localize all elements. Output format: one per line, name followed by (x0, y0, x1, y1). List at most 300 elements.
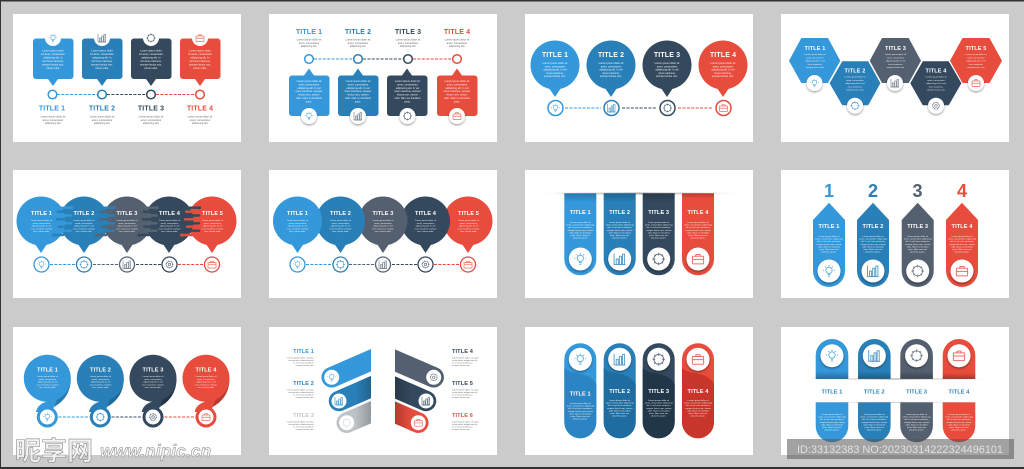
pill 3 (900, 339, 933, 442)
pin 1 (530, 40, 580, 97)
hexagon 5: risus maximus, (969, 63, 984, 66)
pill 4: odio. Nam eu tincidunt (948, 423, 970, 426)
box 4 (180, 30, 220, 86)
panel: circles with curled tails (13, 327, 241, 455)
box 3: lectus non, rutrum (397, 93, 418, 97)
box 2 (82, 30, 122, 86)
right labels: In vel risus maximus, (452, 394, 473, 396)
pill 1: odio. Nam eu tincidunt (569, 412, 592, 415)
curl 1: TITLE 1 (37, 368, 58, 374)
number row: 4 (957, 181, 967, 201)
pill 1: semper lectus non, rutrum (819, 421, 845, 424)
box 1: rutrum odio. (46, 66, 60, 70)
tab 2: pharetra quam. (612, 237, 628, 240)
hexagon 2: amet, consectetur (846, 79, 864, 82)
left labels (287, 349, 314, 431)
pin 5 (444, 196, 492, 253)
pill 4: pharetra quam. (952, 429, 967, 432)
pin 5: non, rutrum odio. (460, 230, 477, 233)
number row: 1 (824, 181, 834, 201)
arrow 4: pharetra quam. (955, 251, 970, 254)
curl 3 (130, 355, 177, 428)
curl 1: adipiscing elit. In vel (38, 381, 58, 384)
timeline (305, 55, 461, 63)
curl 2: non, rutrum odio. (92, 386, 109, 389)
curl 2 (77, 355, 124, 428)
watermark: image id bar: ID:33132383 NO:20230314222324496101 (797, 444, 1003, 456)
box 2: justo. (354, 99, 361, 103)
box 2 (338, 68, 378, 124)
pin 2: risus maximus, (602, 71, 620, 75)
titles: TITLE 4 (444, 29, 470, 36)
pin 1: amet, consectetur (289, 222, 306, 225)
hexagon 1: TITLE 1 (805, 46, 825, 52)
pin 1: TITLE 1 (287, 211, 308, 217)
pill 1: amet, consectetur adipiscing (566, 405, 595, 408)
curl 2: adipiscing elit. In vel (91, 381, 111, 384)
right labels: Lorem ipsum dolor sit amet, (452, 388, 479, 392)
title band: TITLE 1 (822, 389, 842, 395)
titles: TITLE 3 (395, 29, 421, 36)
pill 3: pharetra quam. (909, 429, 924, 432)
left labels: In vel risus maximus, (294, 362, 314, 364)
hexagon 2: adipiscing elit. In vel (845, 82, 865, 85)
curl 3: adipiscing elit. In vel (143, 381, 163, 384)
tab 1: TITLE 1 (570, 210, 591, 216)
pin labels: adipiscing elit. In vel (160, 225, 180, 228)
curl 4: adipiscing elit. In vel (196, 381, 216, 384)
pill 2: TITLE 2 (609, 389, 630, 395)
arrow 1: amet, consectetur adipiscing (815, 238, 844, 241)
box 3: odio. Nam eu tincidunt (395, 96, 421, 100)
tab 4 (682, 193, 714, 275)
pin 1: Lorem ipsum dolor sit (543, 61, 568, 65)
descriptions: adipiscing elit. (301, 44, 317, 48)
pill 3: odio. Nam eu tincidunt (648, 409, 670, 412)
arrow 4: elit. In vel risus maximus, (950, 240, 975, 243)
arrow 3: elit. In vel risus maximus, (905, 240, 930, 243)
title band (800, 378, 990, 403)
pill 3 (643, 343, 675, 438)
box 4: adipiscing elit. In vel (445, 86, 469, 90)
hexagon 1: Lorem ipsum dolor sit (805, 53, 826, 56)
arrow 4: justo. Nam sem nec (951, 248, 973, 251)
box 1: Lorem ipsum dolor sit (297, 79, 322, 83)
pin 1: TITLE 1 (542, 52, 568, 59)
titles: TITLE 2 (89, 106, 115, 112)
box 3: sit amet, consectetur (139, 52, 163, 56)
pin 4: adipiscing elit. In vel (416, 225, 436, 228)
pill 1: TITLE 1 (570, 392, 591, 398)
pill 1: justo. Nam sem nec (570, 415, 591, 418)
number row: 2 (868, 181, 878, 201)
pin labels: risus maximus semper (116, 227, 138, 230)
pill 1: pharetra quam. (825, 429, 840, 432)
title band: TITLE 2 (864, 389, 885, 395)
left labels: In vel risus maximus, (294, 394, 314, 396)
pill 2: pharetra quam. (867, 429, 882, 432)
right ribbons (375, 352, 434, 423)
tab 3: justo. Nam sem nec (648, 234, 669, 237)
pill 3: TITLE 3 (648, 389, 669, 395)
pin 2: TITLE 2 (330, 211, 351, 217)
pin 3: risus maximus, (658, 71, 676, 75)
pin labels: Lorem ipsum dolor sit (202, 219, 223, 222)
arrow 4: TITLE 4 (952, 224, 973, 230)
descriptions: amet, consectetur (141, 118, 161, 122)
descriptions: adipiscing elit. (350, 44, 366, 48)
hexagon 1: amet, consectetur (806, 56, 824, 59)
pin 5: TITLE 5 (458, 211, 479, 217)
pill 4: Lorem ipsum dolor sit (688, 399, 709, 402)
curl 4 (182, 355, 230, 428)
pin 2: amet, consectetur (601, 64, 621, 68)
descriptions: Lorem ipsum dolor sit (297, 38, 322, 42)
pin labels: amet, consectetur (204, 222, 221, 225)
box 4: adipiscing elit. In (190, 56, 210, 60)
arrow 1: semper lectus non, rutrum (816, 243, 842, 246)
pin 1: amet, consectetur (545, 64, 565, 68)
box 1: justo. (305, 99, 312, 103)
tab 2: semper lectus non, rutrum (607, 229, 633, 232)
arrow 2: TITLE 2 (863, 224, 883, 230)
descriptions: amet, consectetur (190, 118, 210, 122)
left labels: Lorem ipsum dolor sit amet, (287, 420, 314, 424)
curl 2: risus maximus semper (90, 383, 112, 386)
arrow 1: Lorem ipsum dolor sit (819, 235, 840, 238)
tab 4: pharetra quam. (691, 237, 706, 240)
descriptions: adipiscing elit. (45, 121, 61, 125)
pill 2: elit. In vel risus maximus, (607, 404, 632, 407)
pin 3 (102, 196, 152, 253)
pin labels: adipiscing elit. In vel (203, 225, 223, 228)
right labels: In vel risus maximus, (452, 362, 473, 364)
pin 3: Lorem ipsum dolor sit (655, 61, 680, 65)
pin 4: TITLE 4 (415, 211, 437, 217)
pin 3: semper lectus non. (656, 74, 678, 78)
right labels: consectetur adipiscing elit. (452, 359, 478, 362)
descriptions: adipiscing elit. (143, 121, 159, 125)
curl 1 (24, 355, 71, 428)
pin labels: amet, consectetur (161, 222, 178, 225)
arrow 2: pharetra quam. (866, 251, 881, 254)
left labels: TITLE 1 (293, 349, 314, 355)
curl 3: risus maximus semper (142, 383, 164, 386)
hexagon 3: adipiscing elit. In vel (886, 60, 906, 63)
box 1: Lorem ipsum dolor (42, 48, 64, 52)
pin 4 (144, 196, 194, 253)
left labels: semper lectus non. (296, 428, 314, 431)
pin labels: TITLE 4 (159, 211, 181, 217)
panel: numbered arrow tabs (781, 170, 1009, 298)
curl 1: non, rutrum odio. (39, 386, 56, 389)
arrow 4: amet, consectetur adipiscing (948, 238, 977, 241)
curl 4: risus maximus semper (195, 383, 217, 386)
box 3: Lorem ipsum dolor sit (395, 79, 420, 83)
box 4: lectus non, rutrum (447, 93, 467, 97)
box 2: adipiscing elit. In (92, 56, 112, 60)
pin labels: amet, consectetur (118, 222, 136, 225)
pill 1: semper lectus non, rutrum (568, 410, 593, 413)
tab 2 (604, 193, 636, 275)
pin labels: amet, consectetur (75, 222, 93, 225)
pin 2: adipiscing elit. In vel (331, 225, 351, 228)
pill 4: TITLE 4 (688, 389, 709, 395)
pin 2: non, rutrum odio. (332, 230, 349, 233)
pin labels: Lorem ipsum dolor sit (74, 219, 95, 222)
pin 2 (586, 40, 636, 97)
pill 3: elit. In vel risus maximus, (904, 418, 929, 421)
box 1: lectus non, rutrum (299, 93, 319, 97)
pill 2: odio. Nam eu tincidunt (863, 423, 886, 426)
pill 2: pharetra quam. (612, 415, 628, 418)
pin 4: Lorem ipsum dolor sit (711, 61, 736, 65)
hexagon 3: amet, consectetur (887, 56, 904, 59)
tab 2: odio. Nam eu tincidunt (609, 231, 631, 234)
number row (824, 181, 967, 201)
watermark: site logo (15, 431, 211, 468)
arrow 3: justo. Nam sem nec (907, 248, 928, 251)
pill 2: amet, consectetur adipiscing (860, 416, 889, 419)
hexagon 2: TITLE 2 (845, 68, 865, 74)
left icons (324, 370, 354, 430)
tab 3: odio. Nam eu tincidunt (648, 231, 670, 234)
pill 4: Lorem ipsum dolor sit (949, 413, 970, 416)
descriptions: amet, consectetur (348, 41, 368, 45)
box 2: adipiscing elit. In vel (346, 86, 370, 90)
curl 2: amet, consectetur (92, 378, 109, 381)
title band: TITLE 4 (949, 389, 970, 395)
box 1: adipiscing elit. In (43, 56, 63, 60)
tab 1: pharetra quam. (573, 237, 588, 240)
pill 3: amet, consectetur adipiscing (645, 402, 673, 405)
box 3: Lorem ipsum dolor (140, 48, 162, 52)
box 4: semper lectus non, (189, 62, 211, 66)
tab 2: elit. In vel risus maximus, (607, 226, 632, 229)
hexagon 3: Lorem ipsum dolor sit (885, 53, 906, 56)
tab 3: amet, consectetur adipiscing (645, 224, 673, 227)
curl 4: amet, consectetur (197, 378, 215, 381)
titles: TITLE 1 (39, 106, 65, 112)
arrow 2: amet, consectetur adipiscing (859, 238, 888, 241)
box 3 (387, 68, 428, 124)
descriptions: Lorem ipsum dolor sit (188, 114, 213, 118)
tab 3 (643, 193, 675, 275)
arrow 2: semper lectus non, rutrum (860, 243, 886, 246)
box 2: rutrum odio. (95, 66, 109, 70)
hexagon 5: TITLE 5 (966, 46, 986, 52)
box 4: risus maximus, semper (444, 89, 470, 93)
number row: 3 (912, 181, 923, 201)
box 3: adipiscing elit. In vel (396, 86, 420, 90)
hexagon 3: risus maximus, (888, 63, 903, 66)
box 2: amet, consectetur (348, 82, 368, 86)
box 3: justo. (403, 99, 411, 103)
arrow 3 (902, 203, 934, 287)
pin 3: amet, consectetur (657, 64, 677, 68)
tab 3: Lorem ipsum dolor sit (648, 221, 670, 224)
watermark: site logo: 昵享网 (15, 431, 93, 468)
pill 3: semper lectus non, rutrum (646, 407, 672, 410)
title band: TITLE 3 (906, 389, 927, 395)
arrow 3: TITLE 3 (907, 224, 928, 230)
pill 2 (604, 343, 636, 438)
box 4: justo. (453, 99, 460, 103)
pill 4: justo. Nam sem nec (948, 426, 970, 429)
pin 1: risus maximus, (546, 71, 564, 75)
pin 4: semper lectus non. (712, 74, 734, 78)
pill 2: odio. Nam eu tincidunt (609, 409, 631, 412)
curl 3: TITLE 3 (143, 368, 163, 374)
pill 4: amet, consectetur adipiscing (945, 416, 974, 419)
box 3: risus maximus, semper (394, 89, 421, 93)
panel: pills crossed by title band (781, 327, 1009, 455)
arrow 3: pharetra quam. (910, 251, 926, 254)
pin 1: non, rutrum odio. (289, 230, 306, 233)
pill 4: semper lectus non, rutrum (946, 421, 972, 424)
pin 1 (273, 196, 322, 253)
tab 2: amet, consectetur adipiscing (606, 224, 634, 227)
box 3: rutrum odio. (144, 66, 158, 70)
pin labels: non, rutrum odio. (33, 230, 50, 233)
box 4: odio. Nam eu tincidunt (444, 96, 470, 100)
tab 4: amet, consectetur adipiscing (684, 224, 713, 227)
hexagon 2: semper lectus non. (846, 89, 865, 92)
arrow 3: amet, consectetur adipiscing (904, 238, 932, 241)
pin 1: semper lectus non. (544, 74, 566, 78)
pill 4: pharetra quam. (691, 415, 706, 418)
box 2: Lorem ipsum dolor (91, 48, 113, 52)
pin labels: non, rutrum odio. (161, 230, 178, 233)
pin 2: semper lectus non. (600, 74, 622, 78)
panel: overlapping pins with interlocking stripes (13, 170, 241, 298)
arrow 3: odio. Nam eu tincidunt (907, 245, 929, 248)
pill 1: Lorem ipsum dolor sit (570, 402, 591, 405)
left labels: Lorem ipsum dolor sit amet, (287, 388, 314, 392)
arrow 3: Lorem ipsum dolor sit (907, 235, 929, 238)
pin labels: risus maximus semper (202, 227, 224, 230)
pin 3: TITLE 3 (654, 52, 680, 59)
pill 1: elit. In vel risus maximus, (820, 418, 845, 421)
descriptions (297, 38, 470, 48)
pin labels: non, rutrum odio. (76, 230, 93, 233)
pin 2: adipiscing elit. In vel (599, 68, 623, 72)
box 3: semper lectus non, (140, 62, 162, 66)
pin 4 (698, 40, 748, 97)
pin 3: adipiscing elit. In vel (655, 68, 679, 72)
right labels: consectetur adipiscing elit. (452, 391, 478, 394)
arrow 2: elit. In vel risus maximus, (861, 240, 886, 243)
pin 5: adipiscing elit. In vel (459, 225, 479, 228)
arrow 2: Lorem ipsum dolor sit (863, 235, 884, 238)
right labels: Lorem ipsum dolor sit amet, (452, 356, 479, 360)
pill 4: semper lectus non, rutrum (685, 407, 711, 410)
pin 2: Lorem ipsum dolor sit (599, 61, 624, 65)
pill 4: justo. Nam sem nec (687, 412, 709, 415)
box 4: Lorem ipsum dolor sit (445, 79, 470, 83)
left labels: semper lectus non. (296, 396, 314, 399)
right icons (411, 370, 441, 430)
hexagon 1: risus maximus, (808, 63, 823, 66)
box 1: vel risus maximus, (42, 59, 64, 63)
tab 4: elit. In vel risus maximus, (686, 226, 711, 229)
hexagon 5: Lorem ipsum dolor sit (966, 53, 987, 56)
hexagon 1: adipiscing elit. In vel (805, 60, 825, 63)
icon timeline (548, 100, 731, 116)
pill 3: amet, consectetur adipiscing (903, 416, 931, 419)
descriptions: Lorem ipsum dolor sit (90, 114, 115, 118)
pin labels: adipiscing elit. In vel (74, 225, 94, 228)
pin 4: adipiscing elit. In vel (711, 68, 735, 72)
pill 4: amet, consectetur adipiscing (684, 402, 713, 405)
pill 1: elit. In vel risus maximus, (568, 407, 593, 410)
hexagon 2: Lorem ipsum dolor sit (845, 76, 866, 78)
pin 2 (60, 196, 108, 253)
pin labels: non, rutrum odio. (119, 230, 136, 233)
tab 1: odio. Nam eu tincidunt (569, 231, 592, 234)
pill 2: amet, consectetur adipiscing (606, 402, 634, 405)
box 4: sit amet, consectetur (188, 52, 212, 56)
right labels: semper lectus non. (452, 428, 471, 431)
hexagon 1: semper lectus non. (806, 66, 825, 69)
pill 4: elit. In vel risus maximus, (947, 418, 972, 421)
tab 1: Lorem ipsum dolor sit (570, 221, 591, 224)
descriptions: amet, consectetur (43, 118, 63, 122)
panel: overlapping pins (269, 170, 497, 298)
pin 5: amet, consectetur (460, 222, 477, 225)
left labels: semper lectus non. (296, 364, 314, 367)
right labels: TITLE 4 (452, 349, 474, 355)
tab 1 (564, 193, 596, 275)
pill 4 (682, 343, 714, 438)
pin 1: Lorem ipsum dolor sit (287, 219, 308, 222)
pill 4 (943, 339, 975, 442)
pill 2: semper lectus non, rutrum (607, 407, 633, 410)
descriptions: amet, consectetur (447, 41, 467, 45)
pill 3: odio. Nam eu tincidunt (906, 423, 928, 426)
pill 1: odio. Nam eu tincidunt (821, 423, 843, 426)
pin labels: adipiscing elit. In vel (117, 225, 137, 228)
tab 4: TITLE 4 (688, 210, 709, 216)
pill 2: elit. In vel risus maximus, (862, 418, 887, 421)
pin labels (31, 211, 224, 233)
box 2: sit amet, consectetur (90, 52, 114, 56)
left ribbons (332, 352, 390, 423)
titles (296, 29, 470, 36)
curl 2: TITLE 2 (90, 368, 111, 374)
pill 2: justo. Nam sem nec (609, 412, 630, 415)
pin labels: risus maximus semper (73, 227, 95, 230)
hexagon 5: adipiscing elit. In vel (966, 60, 986, 63)
pill 1: amet, consectetur adipiscing (818, 416, 847, 419)
titles: TITLE 2 (345, 29, 371, 36)
pill 4: elit. In vel risus maximus, (686, 404, 711, 407)
panel: hexagons (781, 14, 1009, 142)
curl 2: Lorem ipsum dolor sit (90, 375, 111, 378)
hexagon 4: semper lectus non. (927, 89, 946, 92)
arrow 4 (946, 203, 978, 287)
pin labels: TITLE 5 (202, 211, 223, 217)
pin labels: Lorem ipsum dolor sit (159, 219, 180, 222)
right labels: TITLE 5 (452, 381, 473, 387)
pin 4: amet, consectetur (713, 64, 733, 68)
pill 2: Lorem ipsum dolor sit (864, 413, 885, 416)
pin 2: TITLE 2 (598, 52, 624, 59)
box 1: odio. Nam eu tincidunt (296, 96, 322, 100)
arrow 4: odio. Nam eu tincidunt (951, 245, 973, 248)
pin 3: non, rutrum odio. (375, 230, 392, 233)
box 4: rutrum odio. (193, 66, 207, 70)
